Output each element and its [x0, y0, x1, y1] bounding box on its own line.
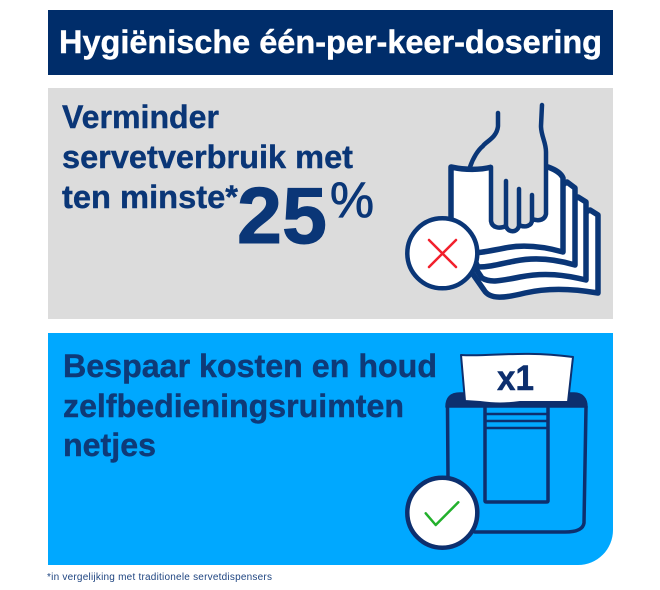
panel heading: Bespaar kosten en houd: [63, 348, 437, 384]
icon: hand taking napkins: [407, 105, 598, 297]
paper x1: x1: [497, 359, 534, 398]
check sign: [407, 478, 477, 548]
panel heading: servetverbruik met: [62, 139, 353, 175]
footnote: *in vergelijking met traditionele servetdispensers: [47, 572, 272, 583]
hand: [491, 160, 546, 231]
big number 25 percent: %: [330, 172, 374, 228]
paper x1: [461, 354, 573, 404]
red cross: [429, 240, 456, 267]
no sign: [407, 218, 477, 288]
title: Hygiënische één-per-keer-dosering: [59, 24, 602, 60]
panel heading: netjes: [63, 427, 156, 463]
panel heading: [62, 99, 353, 215]
icon: dispenser: [407, 354, 587, 548]
panel heading: zelfbedieningsruimten: [63, 388, 404, 424]
panel: reduce napkin use: [48, 88, 613, 319]
panel heading: [63, 348, 437, 463]
big number 25 percent: [237, 171, 374, 260]
panel: save costs: [48, 333, 613, 565]
title banner: [48, 10, 613, 75]
panel heading: Verminder: [62, 99, 219, 135]
green check: [426, 502, 458, 525]
big number 25 percent: 25: [237, 171, 327, 260]
panel heading: ten minste*: [62, 179, 239, 215]
